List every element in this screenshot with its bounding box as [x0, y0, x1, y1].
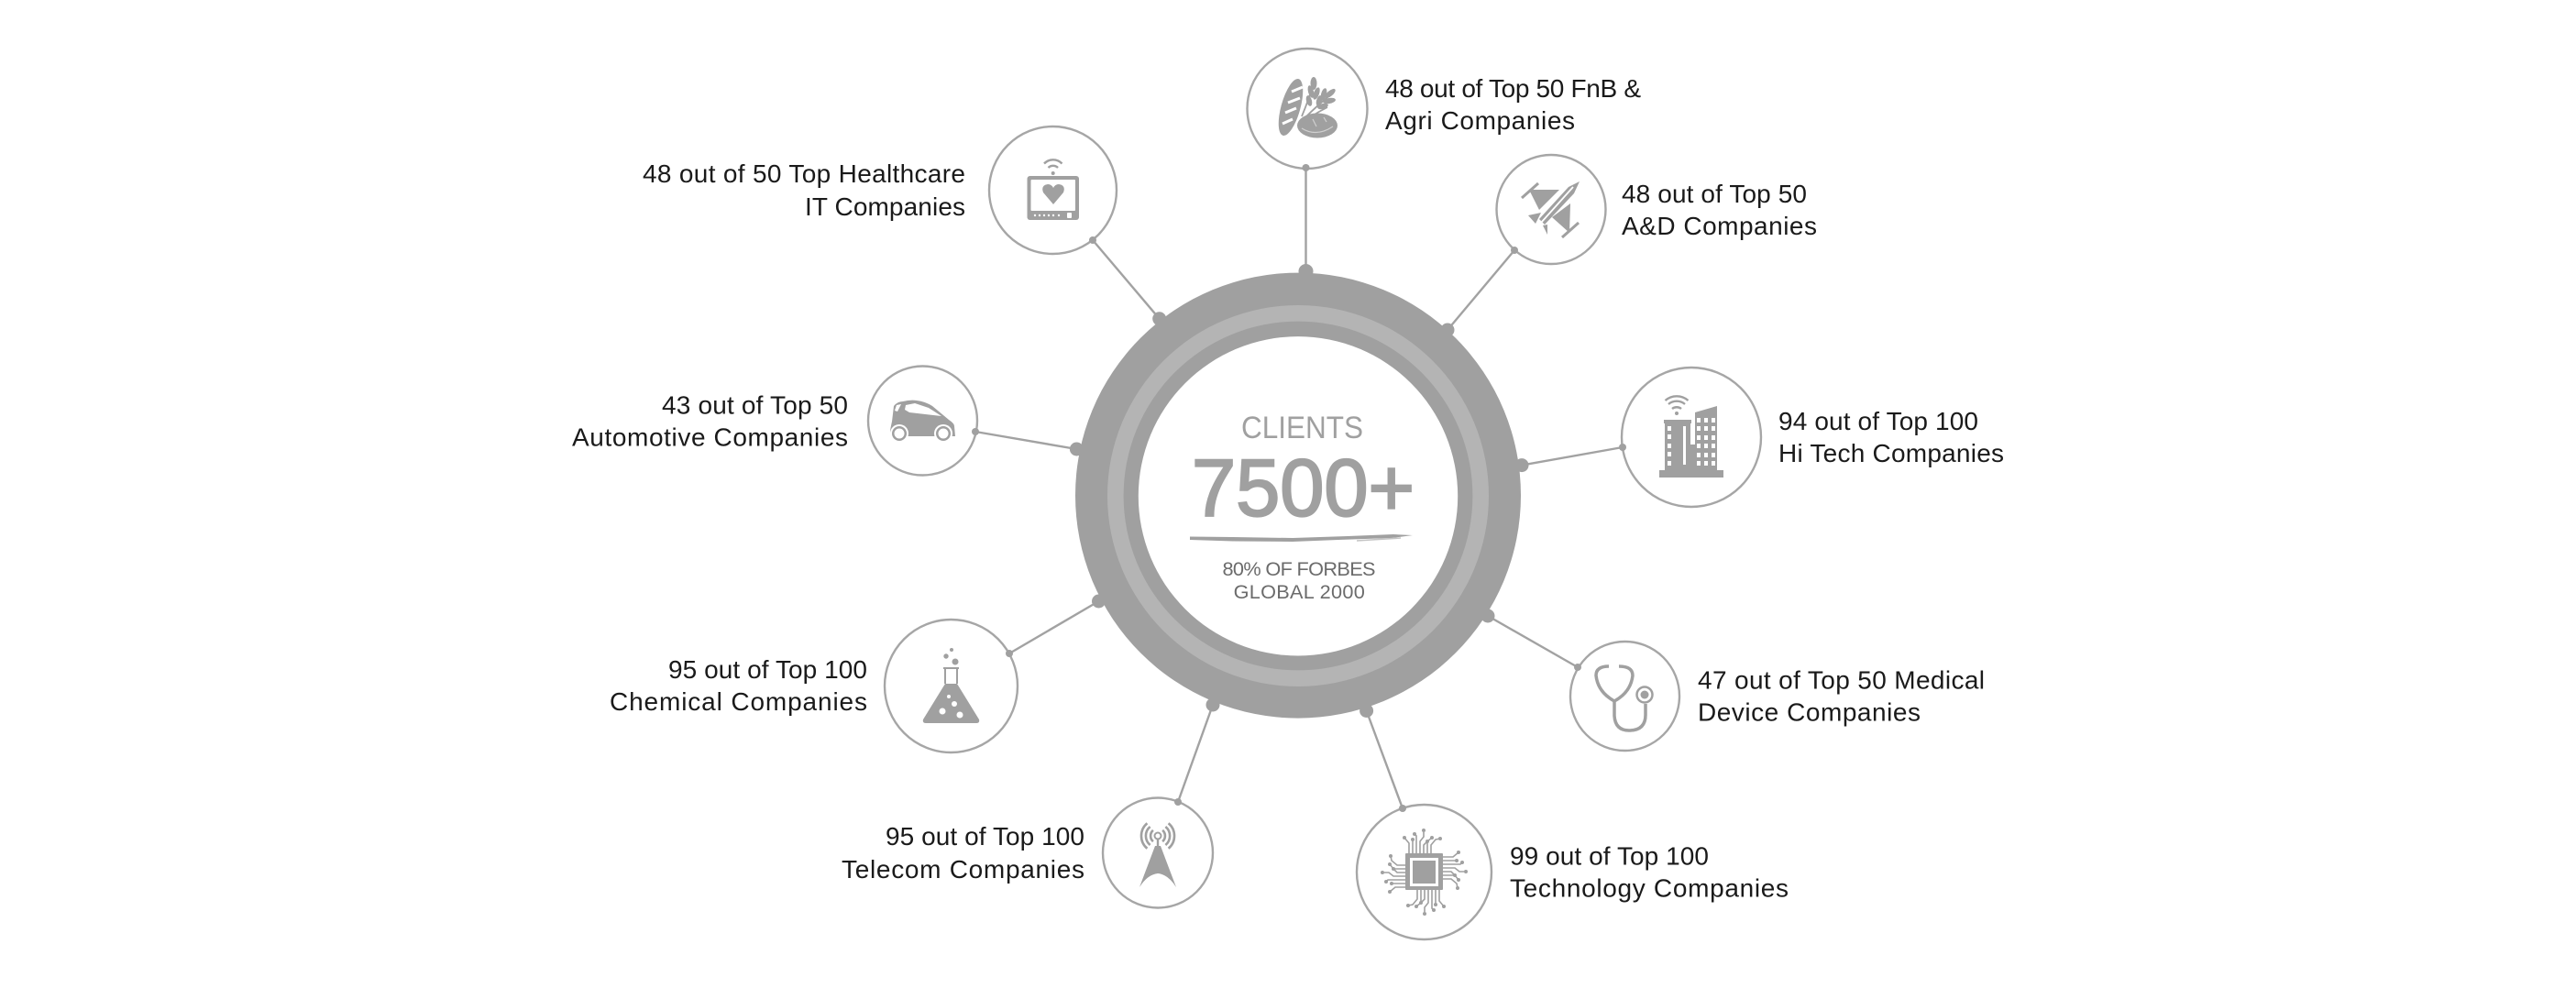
- label: Medical: 47 out of Top 50 Medical: [1698, 665, 1985, 695]
- icon: heart monitor: [1027, 159, 1079, 220]
- label: Automotive: 43 out of Top 50: [662, 390, 848, 420]
- label: Technology: [1510, 841, 1789, 902]
- icon: car: [890, 401, 955, 443]
- icon circle: Technology: [1357, 805, 1492, 939]
- icon circle: Telecom: [1103, 797, 1213, 907]
- panel: Aerospace and Defense: [1496, 155, 1817, 264]
- brush underline: [1190, 534, 1413, 542]
- panel: Technology: [1357, 805, 1789, 939]
- icon: wifi buildings: [1659, 396, 1723, 478]
- label: Hi Tech: 94 out of Top 100: [1778, 407, 1978, 435]
- hub caption: [1223, 557, 1375, 603]
- connector dot: FnB: [1302, 164, 1309, 171]
- hub caption: GLOBAL 2000: [1234, 580, 1365, 603]
- panel: FnB and Agri: [1247, 49, 1641, 171]
- label: Technology: Technology Companies: [1510, 874, 1789, 902]
- panel: Hi Tech: [1619, 368, 2004, 507]
- label: Medical: [1698, 665, 1985, 726]
- icon circle: A&D: [1496, 155, 1606, 264]
- label: Healthcare: [643, 159, 965, 221]
- label: A&D: [1622, 180, 1817, 240]
- hub heading: CLIENTS: [1241, 411, 1363, 445]
- label: Chemical: 95 out of Top 100: [668, 655, 867, 684]
- icon circle: Medical: [1570, 642, 1679, 751]
- hub caption: 80% OF FORBES: [1223, 557, 1375, 580]
- label: Telecom: 95 out of Top 100: [886, 822, 1084, 851]
- panel: Healthcare IT: [643, 126, 1117, 254]
- icon: stethoscope: [1596, 666, 1652, 730]
- connector dot: Automotive: [972, 428, 979, 435]
- label: FnB: [1385, 74, 1641, 135]
- icon circle: FnB: [1247, 49, 1368, 169]
- label: Technology: 99 out of Top 100: [1510, 841, 1709, 871]
- icon: fighter jet: [1522, 181, 1580, 237]
- central hub: [1070, 264, 1529, 719]
- label: Chemical: [610, 655, 867, 716]
- connectors between hub and icon circles: [975, 168, 1623, 808]
- icon: microchip: [1381, 829, 1468, 916]
- label: Healthcare: 48 out of 50 Top Healthcare: [643, 159, 965, 188]
- icon circle: Hi Tech: [1622, 368, 1761, 507]
- icon circle: Chemical: [885, 620, 1018, 752]
- icon circle: Healthcare: [989, 126, 1117, 254]
- icon: bread and wheat: [1273, 76, 1338, 138]
- label: A&D: 48 out of Top 50: [1622, 180, 1807, 208]
- label: Chemical: Chemical Companies: [610, 687, 867, 716]
- hub connector nodes: [1070, 264, 1529, 718]
- label: Hi Tech: Hi Tech Companies: [1778, 439, 2004, 467]
- label: FnB: Agri Companies: [1385, 106, 1575, 135]
- label: Medical: Device Companies: [1698, 698, 1921, 726]
- label: Telecom: [842, 822, 1084, 884]
- connector dot: Chemical: [1006, 650, 1013, 657]
- label: Automotive: Automotive Companies: [572, 423, 848, 451]
- label: FnB: 48 out of Top 50 FnB &: [1385, 74, 1641, 103]
- panel: Telecom: [842, 797, 1213, 907]
- label: Automotive: [572, 390, 848, 451]
- connector dot: Technology: [1399, 805, 1406, 812]
- connector dot: Medical: [1574, 664, 1581, 671]
- panel: Automotive: [572, 367, 979, 475]
- connector dot: Healthcare: [1089, 236, 1096, 244]
- icon: signal tower: [1139, 823, 1176, 887]
- icon: flask: [923, 648, 979, 723]
- panel: Medical Device: [1570, 642, 1985, 751]
- hub number: 7500+: [1192, 443, 1415, 533]
- label: Hi Tech: [1778, 407, 2004, 467]
- icon circle: Automotive: [868, 367, 977, 475]
- connector dot: A&D: [1511, 247, 1518, 254]
- connector dot: Telecom: [1174, 798, 1182, 806]
- label: Telecom: Telecom Companies: [842, 855, 1084, 884]
- label: Healthcare: IT Companies: [805, 192, 965, 221]
- hub rings: [1075, 273, 1521, 719]
- label: A&D: A&D Companies: [1622, 212, 1817, 240]
- panel: Chemical: [610, 620, 1018, 752]
- connector dot: Hi Tech: [1619, 444, 1626, 451]
